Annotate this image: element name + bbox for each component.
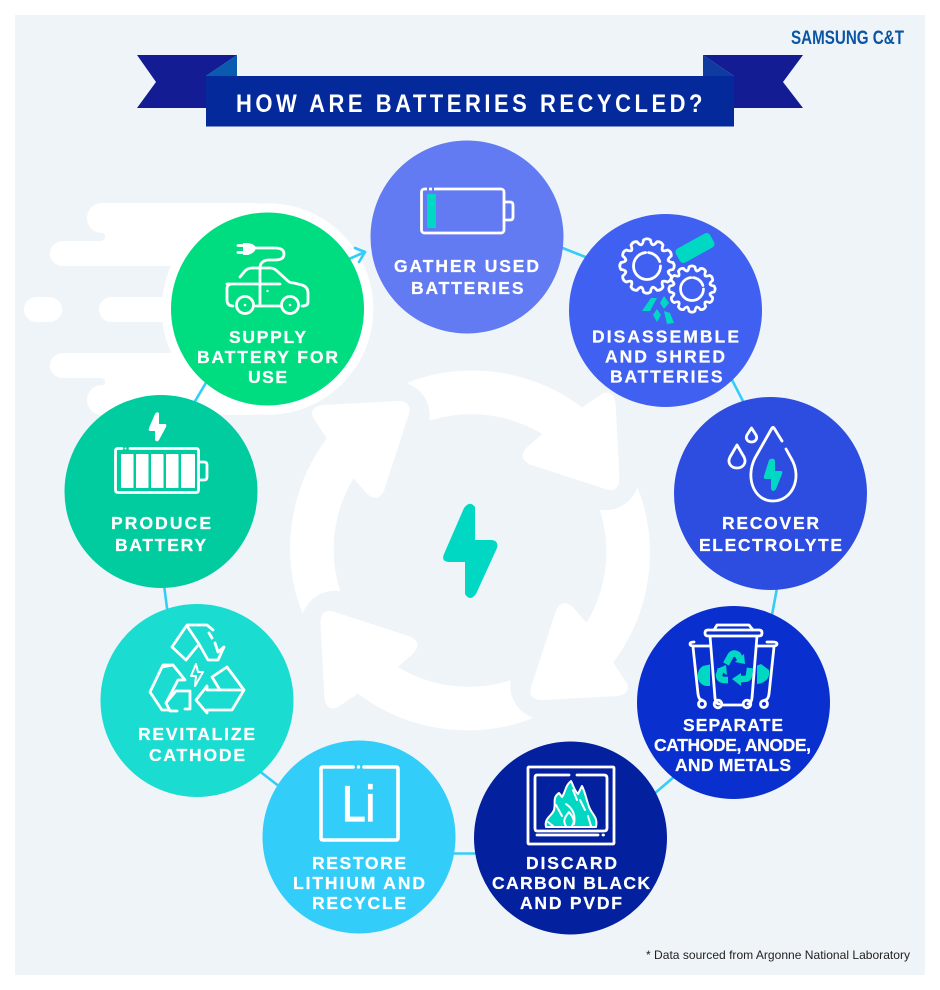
label: AND SHRED bbox=[605, 346, 725, 366]
label: DISASSEMBLE bbox=[592, 326, 739, 346]
label: CARBON BLACK bbox=[492, 873, 650, 893]
logo: SAMSUNG C&T bbox=[791, 28, 904, 49]
label: CATHODE, ANODE, bbox=[654, 735, 811, 755]
label: REVITALIZE bbox=[138, 724, 255, 744]
label bbox=[592, 326, 739, 386]
label bbox=[197, 327, 338, 387]
label: GATHER USED bbox=[394, 256, 539, 276]
label: RECOVER bbox=[722, 513, 819, 533]
label: AND METALS bbox=[675, 755, 791, 775]
title ribbon bbox=[137, 55, 803, 126]
footnote: * Data sourced from Argonne National Laboratory bbox=[646, 948, 910, 962]
icon: recycling bins bbox=[690, 625, 777, 708]
label bbox=[111, 513, 211, 555]
icon: low battery bbox=[422, 189, 513, 233]
icon: lithium element box: Li bbox=[342, 776, 375, 832]
label: BATTERIES bbox=[411, 278, 524, 298]
step: restore lithium and recycle bbox=[262, 740, 456, 934]
label: LITHIUM AND bbox=[293, 873, 425, 893]
label: BATTERY bbox=[115, 535, 206, 555]
icon: electric car with plug bbox=[227, 243, 308, 314]
connector lines bbox=[164, 247, 777, 854]
label: PRODUCE bbox=[111, 513, 211, 533]
ribbon left tail bbox=[137, 55, 237, 108]
step: revitalize cathode bbox=[100, 604, 294, 797]
step: gather used batteries bbox=[370, 140, 564, 334]
step: separate materials bbox=[637, 606, 830, 799]
icon: lithium element box bbox=[321, 765, 398, 840]
label: BATTERY FOR bbox=[197, 347, 338, 367]
ribbon right fold bbox=[703, 55, 734, 76]
step: disassemble and shred bbox=[569, 214, 762, 407]
central cycle arrows bbox=[291, 371, 649, 730]
ribbon left fold bbox=[206, 55, 237, 76]
step: produce battery bbox=[64, 395, 258, 588]
title: HOW ARE BATTERIES RECYCLED? bbox=[236, 90, 706, 118]
label bbox=[138, 724, 255, 765]
label bbox=[654, 715, 811, 775]
icon: furnace with flames bbox=[528, 767, 614, 844]
step: discard carbon black and PVDF bbox=[474, 742, 667, 934]
label: SEPARATE bbox=[683, 715, 783, 735]
label: RESTORE bbox=[312, 853, 406, 873]
label: RECYCLE bbox=[312, 893, 406, 913]
teal recycling symbol bbox=[719, 654, 750, 680]
ribbon banner bbox=[206, 76, 734, 126]
label: USE bbox=[248, 367, 287, 387]
central lightning bolt bbox=[443, 504, 497, 598]
step: recover electrolyte bbox=[674, 397, 867, 590]
label bbox=[699, 513, 842, 555]
label: SUPPLY bbox=[229, 327, 306, 347]
label: DISCARD bbox=[526, 853, 617, 873]
icon: charged battery bbox=[116, 412, 207, 492]
icon: gears and shredded battery bbox=[620, 232, 716, 324]
label: CATHODE bbox=[149, 745, 245, 765]
ribbon right tail bbox=[703, 55, 803, 108]
label bbox=[293, 853, 425, 913]
step: supply battery for use bbox=[171, 212, 364, 406]
label: AND PVDF bbox=[520, 893, 622, 913]
teal side arrows bbox=[698, 664, 769, 686]
speed lines behind supply circle bbox=[24, 203, 373, 415]
label: ELECTROLYTE bbox=[699, 535, 842, 555]
icon: recycling arrows with bolt bbox=[150, 625, 244, 713]
label: BATTERIES bbox=[610, 366, 722, 386]
icon: electrolyte drops bbox=[729, 427, 796, 501]
label bbox=[492, 853, 650, 913]
label bbox=[394, 256, 539, 298]
